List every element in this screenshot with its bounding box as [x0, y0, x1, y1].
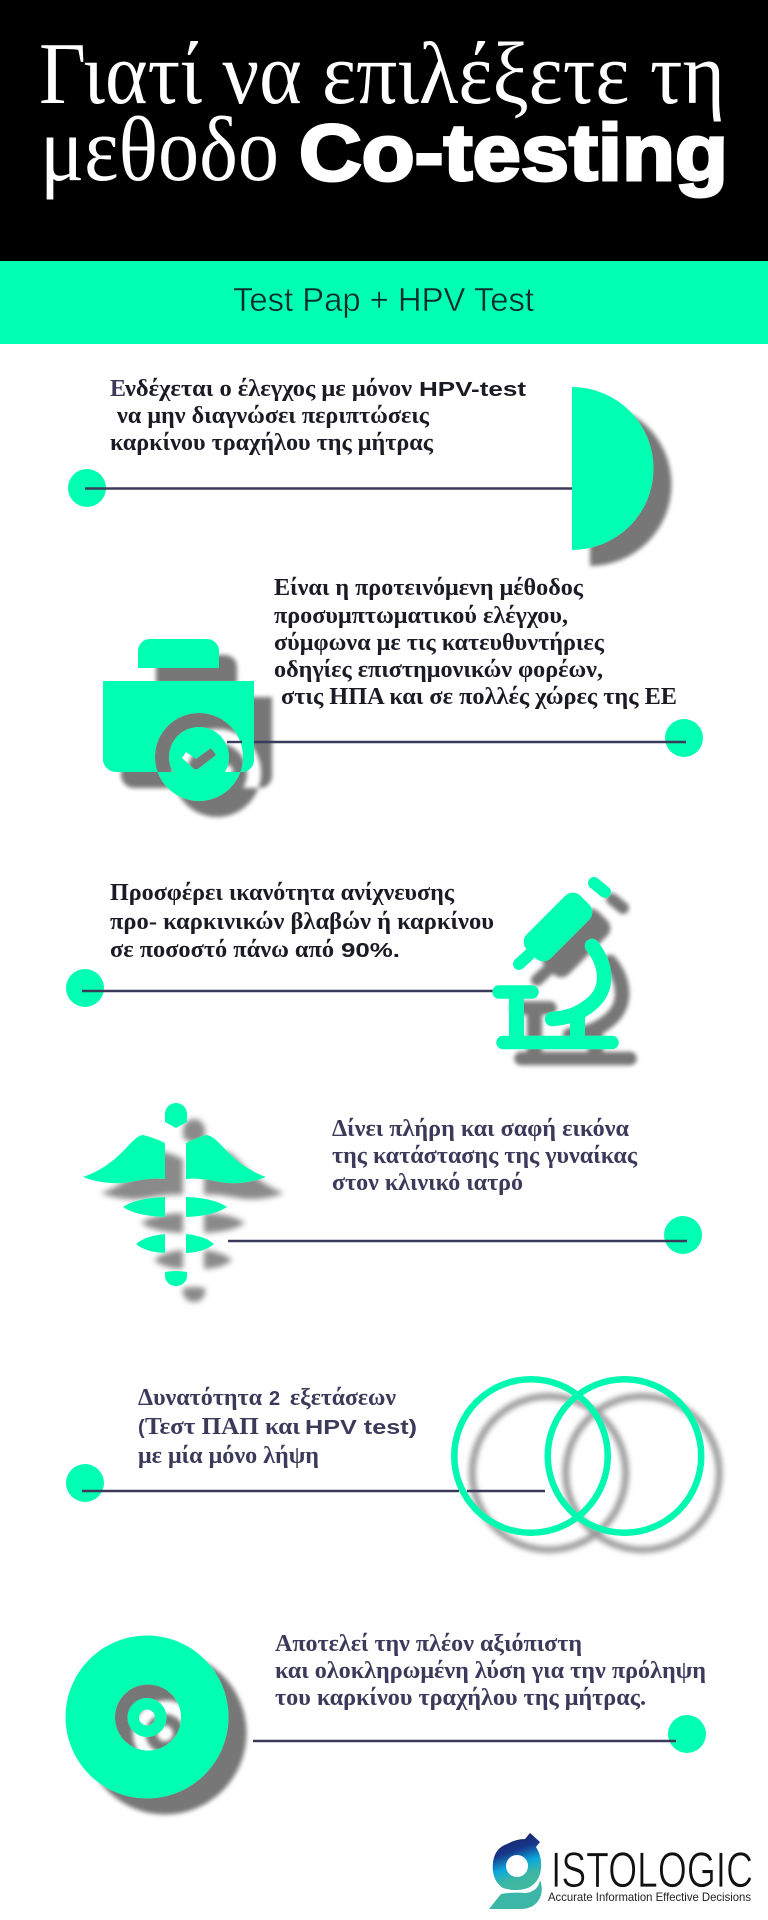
logo — [489, 1833, 753, 1909]
item 2 text: Είναι η προτεινόμενη μέθοδος — [274, 575, 584, 601]
item 1 text: HPV-test — [419, 379, 526, 401]
item 5 text: με μία μόνο λήψη — [138, 1443, 319, 1469]
icon: target disc — [66, 1636, 229, 1798]
icon: logo mark — [493, 1833, 541, 1890]
icon: medical case with check — [103, 639, 254, 801]
subtitle band — [0, 261, 768, 344]
header band — [0, 0, 768, 261]
item 1 text: Ε — [110, 376, 126, 402]
item 6 text: Αποτελεί την πλέον αξιόπιστη — [275, 1631, 582, 1657]
item 1 connector — [68, 469, 572, 507]
item 2 text: προσυμπτωματικού ελέγχου, — [274, 603, 568, 629]
item 6 connector — [253, 1715, 706, 1753]
title line 1: Γιατί να επιλέξετε τη — [39, 26, 725, 123]
item 4 text: στον κλινικό ιατρό — [332, 1170, 523, 1196]
item 2 connector — [227, 719, 703, 757]
item 3 text — [110, 880, 494, 963]
item 5 connector — [66, 1464, 545, 1502]
item 3 text: Προσφέρει ικανότητα ανίχνευσης — [110, 880, 455, 906]
item 4 text: της κατάστασης της γυναίκας — [332, 1143, 638, 1169]
item 1 text: να μην διαγνώσει περιπτώσεις — [116, 403, 430, 429]
item 3 text: 90%. — [341, 940, 400, 962]
item 1 text: καρκίνου τραχήλου της μήτρας — [110, 430, 434, 456]
title emphasis: Co-testing — [299, 108, 728, 197]
item 3 text: προ- καρκινικών βλαβών ή καρκίνου — [110, 909, 494, 935]
item 4 text — [332, 1116, 638, 1196]
logo tagline: Accurate Information Effective Decisions — [548, 1890, 751, 1904]
item 2 text: στις ΗΠΑ και σε πολλές χώρες της ΕΕ — [281, 684, 677, 710]
item 5 text — [138, 1385, 417, 1469]
item 2 text: οδηγίες επιστημονικών φορέων, — [274, 657, 603, 683]
item 3 connector — [66, 969, 494, 1007]
item 6 text — [275, 1631, 706, 1711]
icon: logo descender — [489, 1880, 542, 1909]
subtitle text: Test Pap + HPV Test — [233, 281, 534, 318]
item 3 text: σε ποσοστό πάνω από — [110, 937, 334, 963]
item 2 text — [274, 575, 677, 710]
icon: microscope — [499, 883, 612, 1042]
icon: caduceus — [83, 1103, 266, 1286]
item 2 text: σύμφωνα με τις κατευθυντήριες — [274, 630, 605, 656]
title line 2: μεθοδο — [40, 98, 279, 200]
item 1 text — [110, 376, 526, 456]
icon: overlapping rings — [454, 1379, 701, 1533]
item 5 text: HPV test) — [305, 1417, 417, 1439]
item 5 text: 2 — [269, 1388, 280, 1410]
item 5 text: εξετάσεων — [290, 1385, 396, 1411]
item 4 connector — [228, 1216, 702, 1254]
item 6 text: του καρκίνου τραχήλου της μήτρας. — [275, 1685, 646, 1711]
item 6 text: και ολοκληρωμένη λύση για την πρόληψη — [275, 1658, 706, 1684]
icon: half circle — [572, 387, 654, 550]
item 1 text: νδέχεται ο έλεγχος με μόνον — [124, 376, 412, 402]
item 4 text: Δίνει πλήρη και σαφή εικόνα — [332, 1116, 630, 1142]
item 5 text: Τεστ ΠΑΠ και — [145, 1414, 301, 1440]
item 5 text: ( — [138, 1417, 145, 1439]
item 5 text: Δυνατότητα — [138, 1385, 263, 1411]
